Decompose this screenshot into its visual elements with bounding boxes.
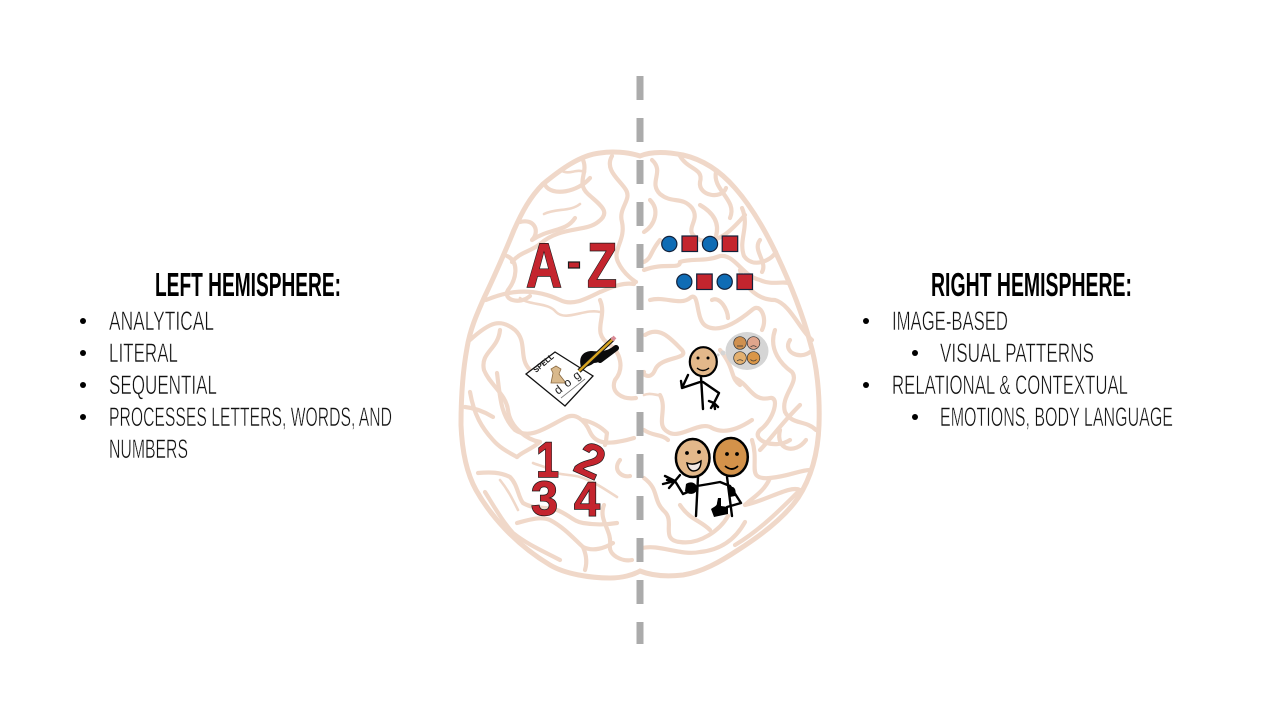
icon: numbers 1 2 3 4: 3 bbox=[531, 473, 558, 526]
icon: visual pattern of circles and squares bbox=[662, 236, 752, 290]
icon: numbers 1 2 3 4 bbox=[531, 431, 613, 527]
list: left hemisphere traits: PROCESSES LETTERS, WORDS, AND bbox=[109, 402, 392, 432]
icon: A-Z letters: A bbox=[526, 231, 562, 301]
central dashed divider bbox=[636, 76, 644, 644]
icon: A-Z letters: Z bbox=[587, 231, 617, 301]
list: left hemisphere traits bbox=[80, 306, 392, 464]
list: right hemisphere traits: VISUAL PATTERNS bbox=[940, 338, 1094, 368]
icon: person thinking about emotions bbox=[681, 332, 768, 409]
list: left hemisphere traits: NUMBERS bbox=[109, 434, 188, 464]
panel: left hemisphere text bbox=[80, 266, 392, 464]
right hemisphere folds bbox=[642, 156, 816, 553]
panel: right hemisphere text bbox=[863, 266, 1173, 432]
left hemisphere folds bbox=[465, 156, 636, 570]
heading: right hemisphere: RIGHT HEMISPHERE: bbox=[931, 266, 1132, 303]
icon: spelling worksheet and pencil: d o g bbox=[551, 368, 583, 397]
list: left hemisphere traits: LITERAL bbox=[109, 338, 178, 368]
icon: spelling worksheet and pencil bbox=[526, 337, 616, 406]
icon: numbers 1 2 3 4: 4 bbox=[574, 474, 600, 527]
list: right hemisphere traits: RELATIONAL & CONTEXTUAL bbox=[892, 370, 1128, 400]
icon: spelling worksheet and pencil: SPELL bbox=[532, 352, 556, 375]
thought bubble with four faces bbox=[726, 332, 768, 370]
list: left hemisphere traits: SEQUENTIAL bbox=[109, 370, 217, 400]
list: left hemisphere traits: ANALYTICAL bbox=[109, 306, 214, 336]
icon: A-Z letters bbox=[526, 231, 617, 301]
icon: numbers 1 2 3 4: 2 bbox=[568, 431, 613, 490]
icon: two friends arm in arm bbox=[663, 438, 748, 517]
list: right hemisphere traits bbox=[863, 306, 1173, 432]
brain illustration bbox=[461, 152, 819, 578]
list: right hemisphere traits: IMAGE-BASED bbox=[892, 306, 1008, 336]
heading: left hemisphere: LEFT HEMISPHERE: bbox=[155, 266, 341, 303]
icon: numbers 1 2 3 4: 1 bbox=[536, 432, 559, 488]
